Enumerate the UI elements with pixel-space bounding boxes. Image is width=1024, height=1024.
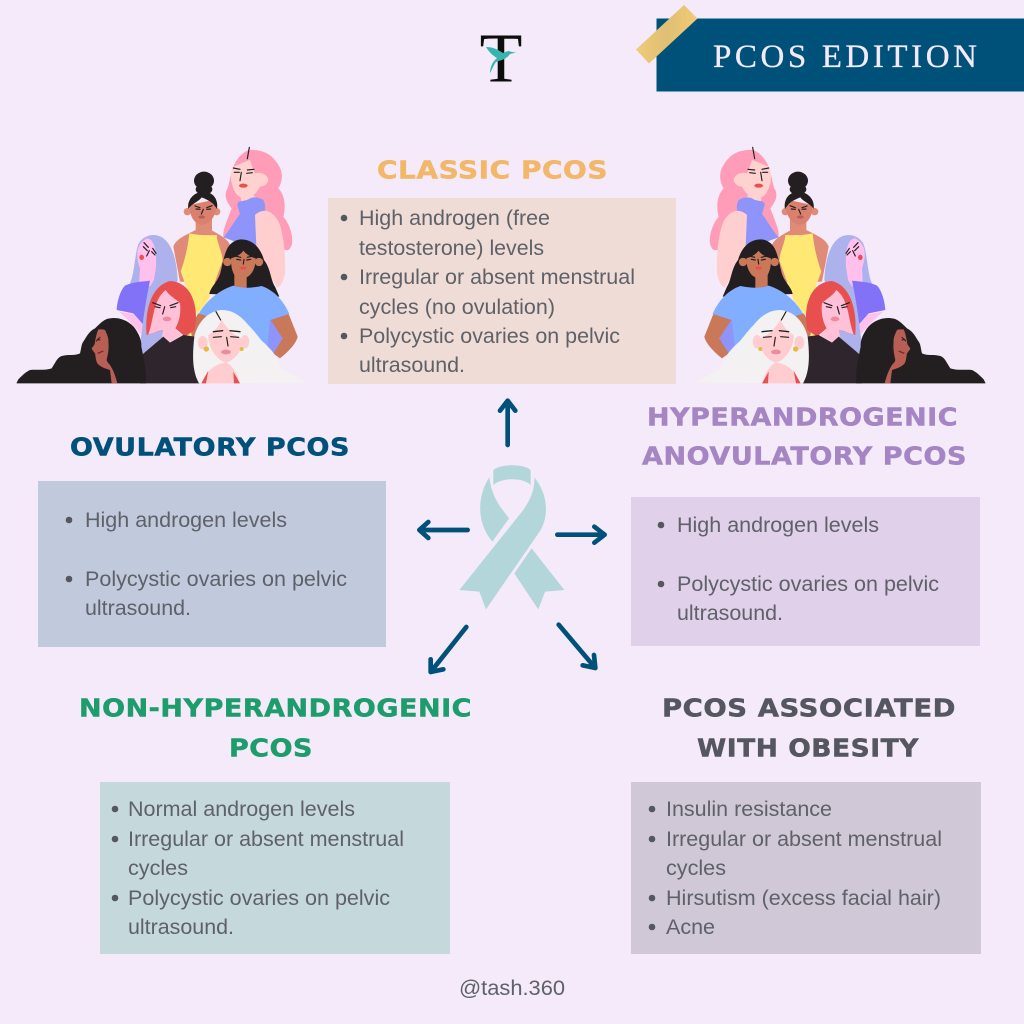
arrow: down-left to non-hyperandrogenic PCOS: [431, 627, 466, 672]
list: ovulatory PCOS criteria: [66, 508, 347, 620]
panel: non-hyperandrogenic PCOS: [79, 694, 472, 954]
list: hyperandrogenic criteria: High androgen levels: [677, 513, 879, 537]
footer handle: @tash.360: [459, 976, 565, 1000]
panel: hyperandrogenic anovulatory PCOS: [631, 402, 980, 646]
heading: hyperandrogenic anovulatory PCOS: ANOVULATORY PCOS: [642, 442, 967, 470]
list: non-hyperandrogenic criteria: Normal androgen levels: [128, 797, 355, 821]
panel: ovulatory PCOS: [38, 432, 386, 647]
panel: classic PCOS: [328, 156, 676, 384]
list: obesity criteria: [649, 797, 942, 939]
list: non-hyperandrogenic criteria: Polycystic ovaries on pelvic: [128, 886, 390, 910]
list: hyperandrogenic criteria: ultrasound.: [677, 601, 783, 625]
gold tape: [636, 5, 698, 64]
panel: PCOS associated with obesity: [631, 694, 981, 954]
list: hyperandrogenic criteria: Polycystic ovaries on pelvic: [677, 572, 939, 596]
logo: T with hummingbird: T: [480, 20, 522, 98]
heading: hyperandrogenic anovulatory PCOS: [642, 402, 967, 470]
list: classic PCOS criteria: Polycystic ovaries on pelvic: [359, 324, 620, 348]
heading: ovulatory PCOS: OVULATORY PCOS: [70, 432, 350, 462]
list: obesity criteria: Hirsutism (excess facial hair): [666, 886, 941, 910]
list: ovulatory PCOS criteria: Polycystic ovaries on pelvic: [85, 567, 347, 591]
banner: PCOS Edition: [636, 5, 1024, 92]
list: classic PCOS criteria: testosterone) levels: [359, 236, 544, 260]
list: ovulatory PCOS criteria: High androgen levels: [85, 508, 287, 532]
list: non-hyperandrogenic criteria: cycles: [128, 856, 188, 880]
list: non-hyperandrogenic criteria: Irregular or absent menstrual: [128, 827, 404, 851]
arrow: left to ovulatory PCOS: [419, 522, 468, 538]
list: non-hyperandrogenic criteria: ultrasound.: [128, 915, 234, 939]
list: obesity criteria: cycles: [666, 856, 726, 880]
arrow: up to classic PCOS: [500, 401, 515, 445]
heading: PCOS associated with obesity: PCOS ASSOCIATED: [662, 694, 956, 722]
list: obesity criteria: Acne: [666, 915, 715, 939]
list: hyperandrogenic criteria: [658, 513, 939, 625]
illustration: group of women, left: [17, 147, 307, 383]
heading: non-hyperandrogenic PCOS: NON-HYPERANDROGENIC: [79, 694, 472, 722]
list: classic PCOS criteria: High androgen (free: [359, 206, 550, 230]
icon: awareness ribbon: [459, 465, 564, 609]
heading: PCOS associated with obesity: WITH OBESITY: [697, 734, 919, 762]
banner title: PCOS EDITION: [713, 39, 977, 75]
list: obesity criteria: Irregular or absent menstrual: [666, 827, 942, 851]
heading: non-hyperandrogenic PCOS: PCOS: [229, 734, 313, 762]
heading: PCOS associated with obesity: [662, 694, 956, 762]
list: classic PCOS criteria: [341, 206, 635, 377]
list: ovulatory PCOS criteria: ultrasound.: [85, 596, 191, 620]
list: classic PCOS criteria: ultrasound.: [359, 353, 465, 377]
illustration: group of women, right: [695, 147, 985, 383]
arrow: down-right to obesity PCOS: [559, 625, 595, 668]
heading: classic PCOS: CLASSIC PCOS: [377, 156, 608, 184]
heading: non-hyperandrogenic PCOS: [79, 694, 472, 762]
list: classic PCOS criteria: Irregular or absent menstrual: [359, 265, 635, 289]
list: obesity criteria: Insulin resistance: [666, 797, 832, 821]
list: non-hyperandrogenic criteria: [112, 797, 404, 939]
heading: hyperandrogenic anovulatory PCOS: HYPERANDROGENIC: [647, 402, 958, 432]
arrow: right to hyperandrogenic PCOS: [557, 527, 605, 543]
list: classic PCOS criteria: cycles (no ovulation): [359, 295, 555, 319]
